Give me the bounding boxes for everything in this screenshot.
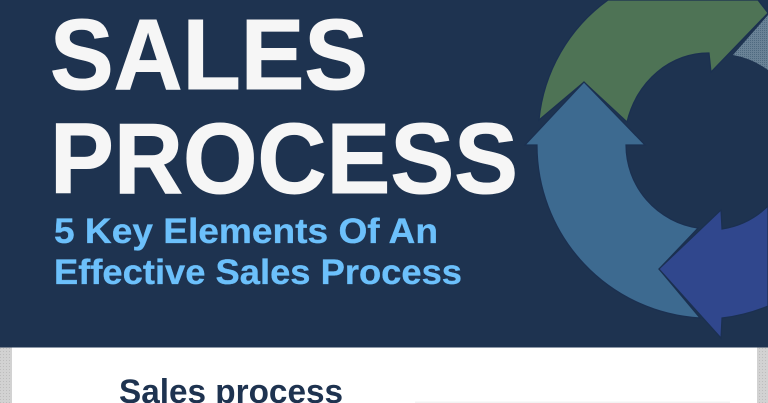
- arrow: grey: [733, 15, 768, 70]
- white content panel: [12, 348, 757, 403]
- subtitle line 1: 5 Key Elements Of An: [54, 211, 438, 251]
- title line: SALES: SALES: [50, 0, 368, 111]
- arrow: dark blue: [659, 206, 768, 338]
- cycle arrows graphic: [525, 0, 768, 338]
- title: [50, 0, 518, 215]
- faint rule: [415, 402, 730, 403]
- arrow: blue: [525, 82, 700, 318]
- arrow: green: [539, 0, 768, 122]
- subtitle: [54, 211, 462, 292]
- page background: [0, 347, 768, 403]
- title line: PROCESS: PROCESS: [50, 103, 518, 215]
- subtitle line 2: Effective Sales Process: [54, 252, 462, 292]
